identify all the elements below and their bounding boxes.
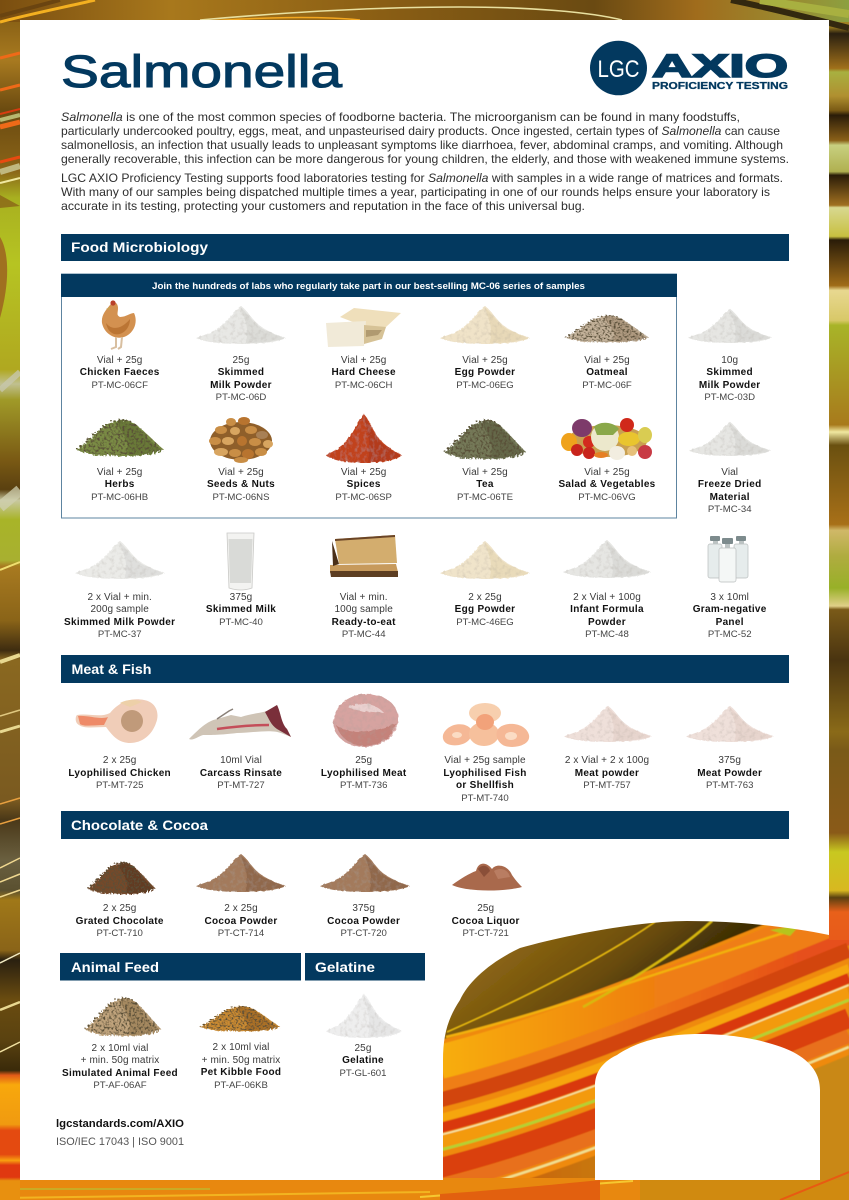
item: Freeze Dried Material: Material (710, 492, 750, 503)
item: Egg Powder 46EG (440, 541, 530, 628)
icon: animal feed heap (60, 987, 180, 1043)
item: Skimmed Milk Powder 37: Skimmed Milk Powder (64, 617, 175, 628)
icon: three vials (708, 536, 748, 582)
icon: meat powder pile (547, 699, 667, 755)
item: Cocoa Liquor: 25g (477, 903, 494, 914)
MC-06 series box: Join the hundreds of labs who regularly take part in our best-selling MC-06 series of samples (152, 281, 585, 292)
item: Skimmed Milk Powder 03D: PT-MC-03D (704, 392, 755, 403)
item: Gram-negative Panel (693, 536, 767, 640)
intro paragraph 1: generally recoverable, this infection can be more dangerous for young children, the elderly, and those with weakened immune systems. (61, 152, 789, 166)
item: Lyophilised Meat (304, 699, 424, 793)
white address box (595, 1034, 820, 1180)
item: Egg Powder 46EG: PT-MC-46EG (456, 617, 514, 628)
icon: gelatine pile (303, 987, 423, 1043)
item: Hard Cheese: PT-MC-06CH (335, 380, 392, 390)
item: Meat powder 757: 2 x Vial + 2 x 100g (565, 755, 649, 766)
item: Skimmed Milk: 375g (230, 592, 252, 603)
item: Freeze Dried Material (689, 422, 771, 515)
section bar: Meat & Fish: Meat & Fish (72, 661, 152, 677)
background: left strip (0, 0, 20, 1200)
item: Hard Cheese: Vial + 25g (341, 354, 386, 366)
footer website: lgcstandards.com/AXIO (56, 1118, 184, 1130)
section bar: Animal Feed (60, 953, 301, 980)
icon: seeds and nuts (209, 417, 273, 463)
icon: spices pile (326, 414, 402, 463)
background: bottom band (0, 1172, 849, 1200)
item: Lyophilised Meat: Lyophilised Meat (321, 768, 406, 779)
icon: infant formula pile (563, 540, 651, 578)
item: Simulated Animal Feed: PT-AF-06AF (93, 1080, 147, 1091)
item: Ready-to-eat: Ready-to-eat (332, 617, 396, 628)
item: Pet Kibble Food (181, 986, 301, 1092)
item: Spices: Spices (347, 479, 381, 490)
item: Skimmed Milk Powder 37: PT-MC-37 (98, 629, 142, 640)
section bar: Food Microbiology (61, 234, 789, 261)
icon: hard cheese (326, 308, 401, 347)
footer accreditation: ISO/IEC 17043 | ISO 9001 (56, 1136, 184, 1148)
item: Seeds & Nuts: PT-MC-06NS (212, 492, 270, 503)
icon: cocoa powder pile (181, 847, 301, 903)
item: Skimmed Milk Powder 03D: 10g (721, 354, 738, 366)
icon: herbs heap (76, 418, 164, 457)
title: Salmonella (61, 46, 343, 97)
item: Infant Formula Powder: Powder (588, 617, 626, 628)
item: Skimmed Milk Powder 03D: Skimmed (706, 367, 753, 378)
item: Salad & Vegetables: PT-MC-06VG (578, 492, 636, 503)
item: Carcass Rinsate: PT-MT-727 (217, 780, 265, 791)
item: Oatmeal (564, 314, 649, 390)
item: Herbs: Vial + 25g (97, 467, 142, 478)
intro paragraph 1: Salmonella is one of the most common species of foodborne bacteria. The microorganism can be found in many foodstuffs, (61, 110, 740, 124)
item: Skimmed Milk Powder 37: 2 x Vial + min. (87, 592, 152, 603)
intro paragraph 2: accurate in its testing, protecting your customers and reputation in the face of this universal bug. (61, 199, 585, 213)
item: Meat Powder 763: Meat Powder (697, 768, 762, 779)
item: Egg Powder 06EG: Vial + 25g (462, 354, 508, 366)
item: Meat powder 757 (547, 699, 667, 793)
item: Salad & Vegetables: Salad & Vegetables (558, 479, 656, 490)
icon: glass of milk (226, 532, 254, 590)
intro paragraph 1 (61, 110, 789, 166)
item: Lyophilised Meat: 25g (355, 755, 372, 766)
item: Lyophilised Fish or Shellfish: or Shellfish (456, 780, 514, 791)
item: Lyophilised Chicken (68, 699, 171, 791)
item: Lyophilised Fish or Shellfish: PT-MT-740 (461, 793, 509, 804)
section bar: Chocolate & Cocoa (61, 811, 789, 839)
item: Hard Cheese: Hard Cheese (331, 367, 396, 378)
item: Lyophilised Fish or Shellfish (425, 699, 545, 805)
item: Ready-to-eat: PT-MC-44 (342, 629, 386, 640)
section bar: Gelatine: Gelatine (315, 959, 375, 975)
icon: wafer biscuit (330, 535, 398, 577)
item: Skimmed Milk: Skimmed Milk (206, 604, 276, 615)
item: Infant Formula Powder: 2 x Vial + 100g (573, 592, 641, 603)
item: Egg Powder 06EG: PT-MC-06EG (456, 380, 514, 390)
item: Herbs (76, 418, 164, 503)
section bar: Food Microbiology: Food Microbiology (71, 239, 208, 255)
MC-06 series box (61, 274, 677, 518)
item: Lyophilised Chicken: Lyophilised Chicken (68, 768, 171, 779)
item: Grated Chocolate: Grated Chocolate (76, 916, 164, 927)
item: Pet Kibble Food: 2 x 10ml vial (213, 1042, 269, 1053)
icon: vegetables (561, 418, 652, 460)
icon: oatmeal heap (564, 314, 649, 343)
item: Seeds & Nuts: Seeds & Nuts (207, 479, 275, 490)
item: Meat powder 757: Meat powder (575, 768, 639, 779)
item: Oatmeal: Oatmeal (586, 367, 628, 378)
item: Skimmed Milk Powder 37: 200g sample (90, 604, 149, 615)
item: Skimmed Milk Powder 06D: Skimmed (218, 367, 264, 378)
item: Skimmed Milk Powder 06D: PT-MC-06D (216, 392, 266, 403)
section bar: Meat & Fish (61, 655, 789, 683)
icon: milk powder pile (688, 309, 772, 343)
item: Tea: PT-MC-06TE (457, 492, 513, 503)
background: cut-out swoosh (440, 890, 849, 1200)
item: Salad & Vegetables: Vial + 25g (584, 467, 630, 478)
background: top band (0, 0, 849, 28)
item: Simulated Animal Feed: Simulated Animal Feed (62, 1068, 178, 1079)
item: Cocoa Powder 714: PT-CT-714 (218, 928, 264, 939)
item: Spices: PT-MC-06SP (335, 492, 392, 503)
icon: milk powder pile (196, 306, 286, 344)
item: Ready-to-eat (330, 535, 398, 640)
item: Skimmed Milk Powder 37 (64, 541, 175, 640)
item: Skimmed Milk Powder 06D (196, 306, 286, 403)
item: Cocoa Powder 720: PT-CT-720 (340, 928, 387, 939)
item: Gelatine: Gelatine (342, 1055, 384, 1066)
icon: frozen meat (304, 699, 424, 755)
item: Lyophilised Fish or Shellfish: Vial + 25g sample (444, 755, 526, 766)
item: Lyophilised Fish or Shellfish: Lyophilised Fish (443, 768, 527, 779)
icon: prawns (425, 699, 545, 755)
logo: LGC AXIO Proficiency Testing: AXIO (652, 48, 788, 84)
item: Pet Kibble Food: PT-AF-06KB (214, 1080, 268, 1090)
item: Herbs: Herbs (105, 479, 135, 490)
icon: freeze dried pile (689, 422, 771, 456)
section bar: Chocolate & Cocoa: Chocolate & Cocoa (71, 817, 208, 833)
item: Herbs: PT-MC-06HB (91, 492, 148, 503)
item: Freeze Dried Material: PT-MC-34 (708, 504, 752, 515)
item: Carcass Rinsate: Carcass Rinsate (200, 768, 282, 779)
icon: meat powder pile (670, 699, 790, 755)
item: Gelatine: PT-GL-601 (340, 1068, 386, 1079)
item: Tea: Vial + 25g (462, 467, 508, 478)
item: Pet Kibble Food: + min. 50g matrix (202, 1054, 280, 1066)
item: Lyophilised Chicken: PT-MT-725 (96, 780, 143, 791)
item: Spices (326, 414, 402, 503)
item: Skimmed Milk Powder 06D: 25g (232, 354, 250, 366)
icon: egg powder pile (440, 306, 530, 344)
item: Infant Formula Powder (563, 540, 651, 640)
icon: pet kibble heap (181, 986, 301, 1042)
item: Meat Powder 763 (670, 699, 790, 793)
item: Chicken Faeces (80, 300, 160, 390)
intro paragraph 1: particularly undercooked poultry, eggs, meat, and unpasteurised dairy products. Once ingested, certain types of Salmonella can cause (61, 124, 780, 138)
icon: milk powder pile (75, 541, 165, 579)
item: Simulated Animal Feed: + min. 50g matrix (81, 1055, 159, 1066)
item: Grated Chocolate: 2 x 25g (103, 903, 136, 914)
icon: carcass (189, 705, 291, 740)
icon: tea heap (443, 418, 526, 460)
item: Ready-to-eat: 100g sample (334, 604, 393, 615)
item: Oatmeal: PT-MC-06F (582, 380, 632, 390)
item: Chicken Faeces: Vial + 25g (97, 354, 142, 366)
item: Carcass Rinsate: 10ml Vial (220, 755, 262, 766)
item: Cocoa Powder 714: Cocoa Powder (204, 916, 278, 927)
item: Spices: Vial + 25g (341, 467, 386, 478)
item: Cocoa Powder 714 (181, 847, 301, 941)
item: Skimmed Milk (206, 532, 276, 628)
item: Skimmed Milk Powder 03D: Milk Powder (699, 380, 761, 390)
item: Cocoa Powder 720: 375g (352, 903, 375, 914)
item: Simulated Animal Feed (60, 987, 180, 1093)
item: Salad & Vegetables (558, 418, 656, 503)
item: Meat powder 757: PT-MT-757 (583, 780, 631, 791)
icon: chicken (102, 300, 136, 350)
logo: LGC AXIO Proficiency Testing: LGC (598, 56, 640, 83)
item: Egg Powder 06EG (440, 306, 530, 390)
background: right strip (829, 0, 849, 940)
item: Gram-negative Panel: PT-MC-52 (708, 629, 752, 640)
icon: cocoa liquor (426, 847, 546, 903)
item: Infant Formula Powder: PT-MC-48 (585, 629, 629, 640)
item: Skimmed Milk: PT-MC-40 (219, 617, 263, 628)
item: Cocoa Liquor: PT-CT-721 (462, 928, 509, 939)
item: Skimmed Milk Powder 06D: Milk Powder (210, 380, 272, 390)
icon: chicken leg (76, 699, 158, 743)
icon: egg powder pile (440, 541, 530, 579)
item: Lyophilised Meat: PT-MT-736 (340, 780, 387, 791)
item: Egg Powder 46EG: Egg Powder (455, 604, 515, 615)
item: Infant Formula Powder: Infant Formula (570, 604, 644, 615)
item: Cocoa Powder 714: 2 x 25g (224, 903, 258, 914)
item: Carcass Rinsate (189, 705, 291, 791)
intro paragraph 2 (61, 171, 783, 213)
intro paragraph 2: LGC AXIO Proficiency Testing supports food laboratories testing for Salmonella with samples in a wide range of matrices and formats. (61, 171, 783, 185)
item: Gram-negative Panel: 3 x 10ml (710, 592, 749, 603)
item: Cocoa Liquor (426, 847, 546, 941)
item: Lyophilised Chicken: 2 x 25g (103, 755, 136, 766)
item: Gelatine: 25g (354, 1043, 372, 1054)
item: Ready-to-eat: Vial + min. (340, 592, 388, 603)
item: Cocoa Powder 720: Cocoa Powder (327, 916, 400, 927)
intro paragraph 2: With many of our samples being dispatched multiple times a year, participating in one of our rounds helps ensure your laboratory is (61, 185, 770, 199)
logo: LGC AXIO Proficiency Testing: PROFICIENCY TESTING (652, 81, 788, 92)
icon: cocoa powder pile (304, 847, 424, 903)
item: Grated Chocolate (60, 847, 180, 941)
section bar: Gelatine (305, 953, 425, 980)
item: Seeds & Nuts (207, 417, 275, 503)
item: Chicken Faeces: Chicken Faeces (80, 367, 160, 378)
item: Oatmeal: Vial + 25g (584, 354, 630, 366)
item: Chicken Faeces: PT-MC-06CF (91, 380, 148, 390)
item: Pet Kibble Food: Pet Kibble Food (201, 1067, 281, 1078)
item: Freeze Dried Material: Freeze Dried (698, 479, 762, 490)
item: Freeze Dried Material: Vial (721, 467, 738, 478)
item: Gelatine (303, 987, 423, 1080)
item: Egg Powder 06EG: Egg Powder (455, 367, 515, 378)
icon: grated chocolate (60, 847, 180, 903)
item: Gram-negative Panel: Gram-negative (693, 604, 767, 615)
item: Grated Chocolate: PT-CT-710 (96, 928, 143, 939)
item: Cocoa Liquor: Cocoa Liquor (452, 916, 520, 927)
item: Seeds & Nuts: Vial + 25g (218, 467, 264, 478)
intro paragraph 1: salmonellosis, an infection that usually leads to unpleasant symptoms like diarrhoea, fever, abdominal cramps, and vomiting. Although (61, 138, 783, 152)
item: Hard Cheese (326, 308, 401, 390)
item: Cocoa Powder 720 (304, 847, 424, 941)
item: Tea (443, 418, 526, 503)
item: Gram-negative Panel: Panel (716, 617, 744, 628)
section bar: Animal Feed: Animal Feed (71, 959, 159, 975)
item: Skimmed Milk Powder 03D (688, 309, 772, 403)
item: Meat Powder 763: 375g (718, 755, 741, 766)
item: Meat Powder 763: PT-MT-763 (706, 780, 753, 791)
logo: LGC AXIO Proficiency Testing (590, 41, 788, 95)
item: Egg Powder 46EG: 2 x 25g (468, 592, 502, 603)
item: Tea: Tea (476, 479, 494, 490)
item: Simulated Animal Feed: 2 x 10ml vial (92, 1043, 148, 1054)
